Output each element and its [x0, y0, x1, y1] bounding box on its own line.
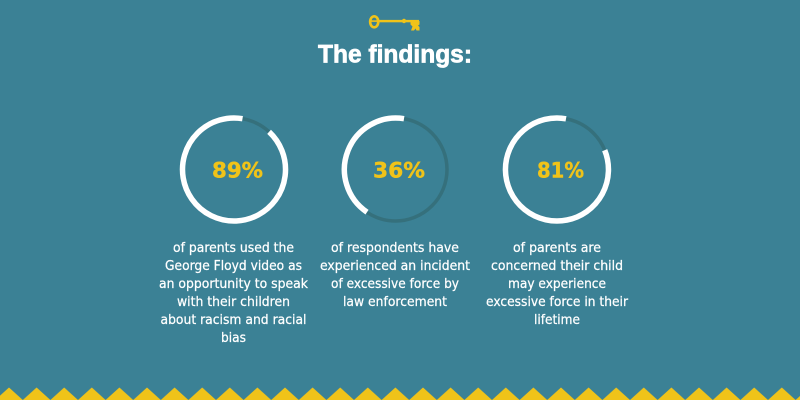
value: 89%: 89%: [212, 158, 263, 182]
description: 36%: experienced an incident: [320, 258, 470, 274]
description: 81%: concerned their child: [491, 258, 623, 274]
description: 89%: George Floyd video as: [165, 258, 302, 274]
description: 81%: of parents are: [513, 240, 601, 256]
zigzag border: [0, 388, 800, 400]
ring chart: 36%: [344, 118, 447, 221]
title: The findings:: [318, 40, 472, 68]
description: 89%: about racism and racial: [160, 312, 306, 328]
panel: 81% stat: [486, 118, 628, 328]
description: 36%: of respondents have: [331, 240, 459, 256]
description: 81%: [486, 240, 628, 328]
description: 89%: an opportunity to speak: [159, 276, 308, 292]
description: 89%: with their children: [177, 294, 290, 310]
description: 89%: [159, 240, 308, 346]
icon: key: [369, 15, 420, 30]
description: 81%: may experience: [508, 276, 606, 292]
description: 36%: [320, 240, 470, 310]
description: 81%: lifetime: [534, 312, 580, 328]
description: 89%: bias: [221, 330, 246, 346]
description: 36%: of excessive force by: [331, 276, 459, 292]
ring chart: 89%: [182, 118, 286, 221]
description: 81%: excessive force in their: [486, 294, 628, 310]
panel: 89% stat: [159, 118, 308, 346]
panel: 36% stat: [320, 118, 470, 310]
value: 81%: 81%: [537, 158, 584, 182]
description: 89%: of parents used the: [173, 240, 294, 256]
description: 36%: law enforcement: [343, 294, 447, 310]
value: 36%: 36%: [373, 158, 425, 182]
ring chart: 81%: [505, 118, 608, 221]
